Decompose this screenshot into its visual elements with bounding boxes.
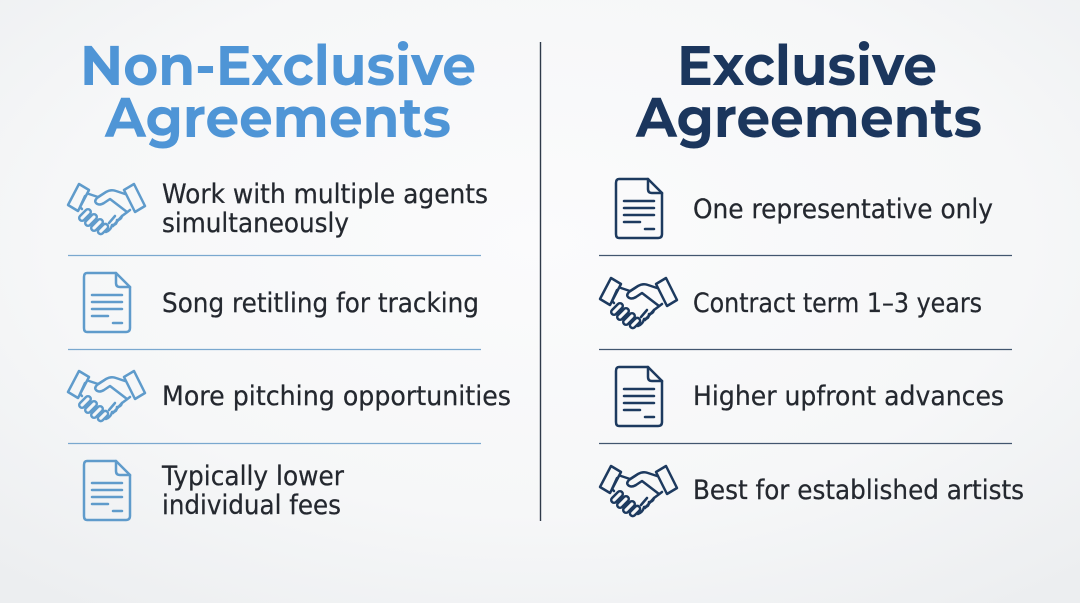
text: typically lower individual fees: individual fees xyxy=(162,490,341,521)
heading: non-exclusive agreements: Non-Exclusive xyxy=(80,32,476,100)
panel: non-exclusive agreements xyxy=(68,32,511,521)
heading: exclusive agreements xyxy=(635,32,982,152)
panel: exclusive agreements xyxy=(599,32,1024,517)
heading: non-exclusive agreements xyxy=(80,32,476,152)
icon: handshake, contract term xyxy=(600,278,677,329)
text: work with multiple agents: simultaneously xyxy=(162,208,349,239)
text: contract term: Contract term 1–3 years xyxy=(693,288,982,319)
icon: handshake, established artists xyxy=(600,466,677,517)
icon: document, lower fees xyxy=(84,461,130,520)
text: more pitching opportunities: More pitching opportunities xyxy=(162,381,511,412)
text: work with multiple agents: Work with multiple agents xyxy=(162,179,488,210)
heading: exclusive agreements: Agreements xyxy=(635,84,982,152)
icon: handshake, multiple agents xyxy=(68,184,145,235)
icon: document, upfront advances xyxy=(616,367,662,426)
heading: exclusive agreements: Exclusive xyxy=(677,32,937,100)
text: work with multiple agents xyxy=(162,179,488,239)
text: typically lower individual fees xyxy=(161,461,344,521)
icon: handshake, pitching xyxy=(68,371,145,422)
text: typically lower individual fees: Typically lower xyxy=(161,461,344,492)
text: best for established artists: Best for established artists xyxy=(693,475,1024,506)
heading: non-exclusive agreements: Agreements xyxy=(104,84,451,152)
text: one representative only: One representative only xyxy=(693,194,993,225)
icon: document, one representative xyxy=(616,179,662,238)
text: song retitling: Song retitling for tracking xyxy=(162,288,479,319)
icon: document, song retitling xyxy=(84,273,130,332)
text: higher upfront advances: Higher upfront advances xyxy=(693,381,1004,412)
